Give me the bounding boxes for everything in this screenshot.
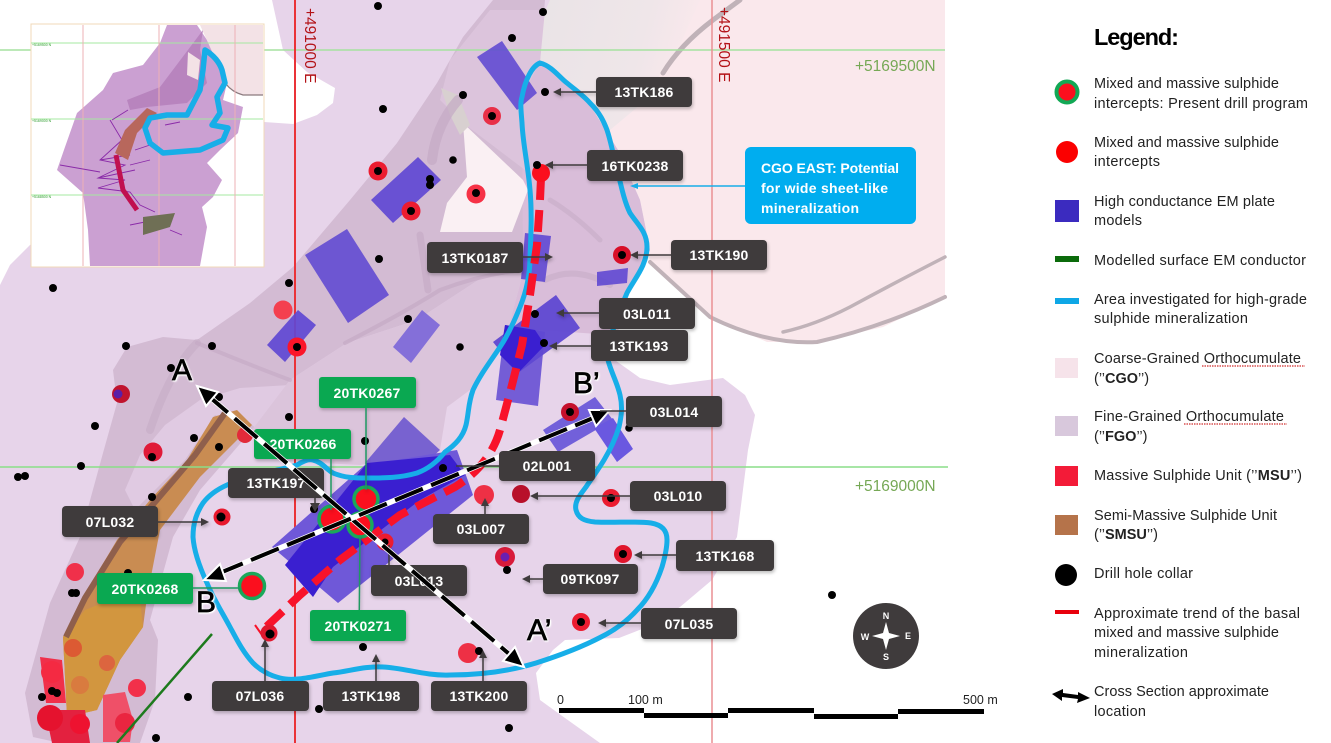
- label: 13TK190: [630, 240, 767, 270]
- label: 20TK0268: [97, 573, 240, 604]
- inset: coordinate labels: [32, 43, 52, 199]
- label: 13TK190: 13TK190: [690, 247, 749, 263]
- legend: SMSU: [1055, 508, 1277, 543]
- cross section A-A': [197, 386, 524, 667]
- label: 02L001: [456, 451, 595, 481]
- inset: coordinate labels: +5169000 N: [32, 119, 52, 123]
- drill hole collars: [14, 2, 836, 742]
- inset: CGO lower edge: [226, 84, 263, 95]
- inset: coordinate labels: +5168500 N: [32, 195, 52, 199]
- legend: MSU: Massive Sulphide Unit (’’MSU’’): [1094, 468, 1302, 484]
- scale bar: 100 m: [628, 693, 663, 707]
- grid line: +491500 E: [711, 0, 713, 743]
- geology: inner purple zone: [505, 62, 650, 340]
- grid line: +5169500N: [0, 49, 945, 51]
- label: 13TK186: 13TK186: [614, 84, 674, 100]
- label: 13TK193: [549, 330, 688, 361]
- section letter A': A’: [527, 614, 551, 647]
- present drill program intercepts: [240, 487, 378, 598]
- label: 16TK0238: [545, 150, 683, 181]
- label: 20TK0268: 20TK0268: [112, 581, 179, 597]
- label: 03L010: [530, 481, 726, 511]
- semi-massive sulphide unit: [63, 410, 252, 717]
- legend: sulphide intercepts: intercepts: [1094, 154, 1160, 170]
- geology: streaks: [150, 100, 610, 430]
- map panel: [0, 0, 998, 743]
- legend: FGO: (’’FGO’’): [1094, 429, 1147, 445]
- legend: present drill program: Mixed and massive sulphide: [1094, 76, 1279, 92]
- legend: trend: mineralization: [1094, 645, 1188, 661]
- inset map: [31, 24, 264, 267]
- label: 13TK193: 13TK193: [610, 338, 669, 354]
- label: 13TK0187: [427, 242, 553, 273]
- callout: CGO East: mineralization: [761, 200, 859, 216]
- legend: EM plate: models: [1094, 213, 1142, 229]
- inset: drill traces: [60, 110, 182, 235]
- label: 13TK200: 13TK200: [450, 688, 509, 704]
- label: 20TK0266: [254, 429, 351, 510]
- legend: drill collar: Drill hole collar: [1094, 566, 1193, 582]
- basal sulphide trend: [255, 164, 550, 635]
- label: 20TK0266: 20TK0266: [270, 436, 337, 452]
- icon: compass rose: N: [883, 611, 889, 621]
- legend: area investigated: sulphide mineralization: [1094, 311, 1248, 327]
- inset: area outline: [145, 50, 228, 153]
- label: 07L032: [62, 506, 209, 537]
- label: 02L001: 02L001: [523, 458, 571, 474]
- legend: sulphide intercepts: Mixed and massive sulphide: [1094, 135, 1279, 151]
- label: 03L011: [556, 298, 695, 329]
- label: 03L013: 03L013: [395, 573, 443, 589]
- cross section B-B': [204, 410, 610, 581]
- inset: section grid: [31, 25, 263, 266]
- grid line: +5169000N: [0, 466, 948, 468]
- label: 13TK186: [553, 77, 692, 107]
- legend: sulphide intercepts: [1056, 135, 1279, 170]
- label: 16TK0238: 16TK0238: [602, 158, 669, 174]
- legend: cross section: location: [1094, 704, 1146, 720]
- geology: upper band tone: [440, 10, 545, 170]
- inset: massive sulphide: [116, 155, 137, 210]
- legend: trend: Approximate trend of the basal: [1094, 606, 1300, 622]
- section letter A: A: [172, 354, 192, 387]
- scale bar: [557, 693, 998, 719]
- legend: cross section: [1052, 684, 1269, 720]
- label: 07L032: 07L032: [86, 514, 134, 530]
- legend: cross section: Cross Section approximate: [1094, 684, 1269, 700]
- label: 03L014: 03L014: [650, 404, 698, 420]
- icon: compass rose: S: [883, 652, 889, 662]
- geology: lighter lobe: [125, 385, 290, 510]
- geology: mauve central zone: [252, 273, 523, 465]
- label: 13TK0187: 13TK0187: [442, 250, 509, 266]
- section letter B: B: [196, 586, 216, 619]
- northing label 5169500: +5169500N: [855, 58, 936, 75]
- inset: small pale window: [187, 52, 200, 80]
- legend: trend: [1055, 606, 1300, 661]
- legend: SMSU: Semi-Massive Sulphide Unit: [1094, 508, 1277, 524]
- callout: CGO East: CGO EAST: Potential: [761, 160, 899, 176]
- inset: grey body: [143, 213, 175, 235]
- label: 07L035: [598, 608, 737, 639]
- easting label 491500: +491500 E: [715, 7, 732, 82]
- geology: darker FGO band: [25, 0, 545, 743]
- label: 03L010: 03L010: [654, 488, 702, 504]
- label: 13TK197: 13TK197: [246, 475, 306, 491]
- geology: grey upper zone: [525, 0, 700, 130]
- legend: CGO: [1055, 351, 1305, 387]
- icon: compass rose: W: [861, 632, 870, 642]
- inset: sulphide body: [115, 108, 157, 160]
- label: 20TK0267: [319, 377, 416, 490]
- legend title: Legend:: [1094, 24, 1179, 50]
- legend: FGO: Fine-Grained Orthocumulate: [1094, 409, 1284, 425]
- inset: coordinate labels: +5169500 N: [32, 43, 52, 47]
- label: 07L036: 07L036: [236, 688, 284, 704]
- icon: compass rose: [853, 603, 919, 669]
- legend: surface conductor: Modelled surface EM conductor: [1094, 253, 1306, 269]
- legend: CGO: Coarse-Grained Orthocumulate: [1094, 351, 1301, 367]
- legend: CGO: (’’CGO’’): [1094, 371, 1149, 387]
- legend: EM plate: High conductance EM plate: [1094, 194, 1275, 210]
- label: 07L036: [212, 639, 309, 711]
- easting label 491000: +491000 E: [301, 8, 318, 83]
- inset: FGO envelope: [57, 25, 243, 266]
- icon: compass rose: E: [905, 631, 911, 641]
- inset: CGO: [200, 25, 263, 95]
- callout: CGO East: for wide sheet-like: [761, 180, 888, 196]
- scale bar: 0: [557, 693, 564, 707]
- label: 03L007: [433, 498, 529, 544]
- label: 13TK200: [431, 650, 527, 711]
- label: 20TK0271: [310, 535, 406, 641]
- label: 03L011: 03L011: [623, 306, 671, 322]
- inset: darker band: [127, 30, 207, 110]
- label: 03L014: [600, 396, 722, 427]
- area investigated outline: [193, 63, 667, 679]
- sulphide intercepts: [112, 107, 632, 663]
- grid line: +491000 E: [294, 0, 296, 743]
- legend: present drill program: intercepts: Present drill program: [1094, 96, 1308, 112]
- inset frame: [31, 24, 264, 267]
- massive sulphide unit: [37, 427, 253, 743]
- legend: FGO: [1055, 409, 1287, 445]
- label: 09TK097: [522, 564, 638, 594]
- legend: trend: mixed and massive sulphide: [1094, 625, 1279, 641]
- EM plate models: [267, 41, 633, 603]
- label: 03L007: 03L007: [457, 521, 505, 537]
- label: 13TK197: [228, 468, 324, 512]
- label: 13TK168: 13TK168: [696, 548, 755, 564]
- label: 13TK168: [634, 540, 774, 571]
- legend: SMSU: (’’SMSU’’): [1094, 527, 1158, 543]
- legend panel: [1052, 24, 1308, 720]
- legend: EM plate: [1055, 194, 1275, 229]
- label: 09TK097: 09TK097: [560, 571, 620, 587]
- geology: coarse-grained orthocumulate: [540, 0, 945, 342]
- geology: pale window: [440, 123, 528, 232]
- label: 13TK198: [323, 654, 419, 711]
- label: 20TK0267: 20TK0267: [334, 385, 401, 401]
- section letter B': B’: [573, 367, 600, 400]
- scale bar: 500 m: [963, 693, 998, 707]
- geology: fine-grained orthocumulate: [0, 0, 755, 743]
- geology: grey window: [441, 88, 470, 135]
- legend: area investigated: [1055, 292, 1307, 327]
- legend: present drill program: [1056, 76, 1308, 112]
- modelled surface EM conductor: [117, 634, 212, 743]
- callout: CGO East: [630, 147, 916, 224]
- label: 13TK198: 13TK198: [342, 688, 401, 704]
- geology: grey CGO streaks: [650, 0, 945, 342]
- legend: MSU: [1055, 466, 1302, 486]
- legend: drill collar: [1055, 564, 1193, 586]
- northing label 5169000: +5169000N: [855, 478, 936, 495]
- legend: area investigated: Area investigated for high-grade: [1094, 292, 1307, 308]
- label: 03L013: [371, 545, 467, 596]
- label: 07L035: 07L035: [665, 616, 713, 632]
- label: 20TK0271: 20TK0271: [325, 618, 392, 634]
